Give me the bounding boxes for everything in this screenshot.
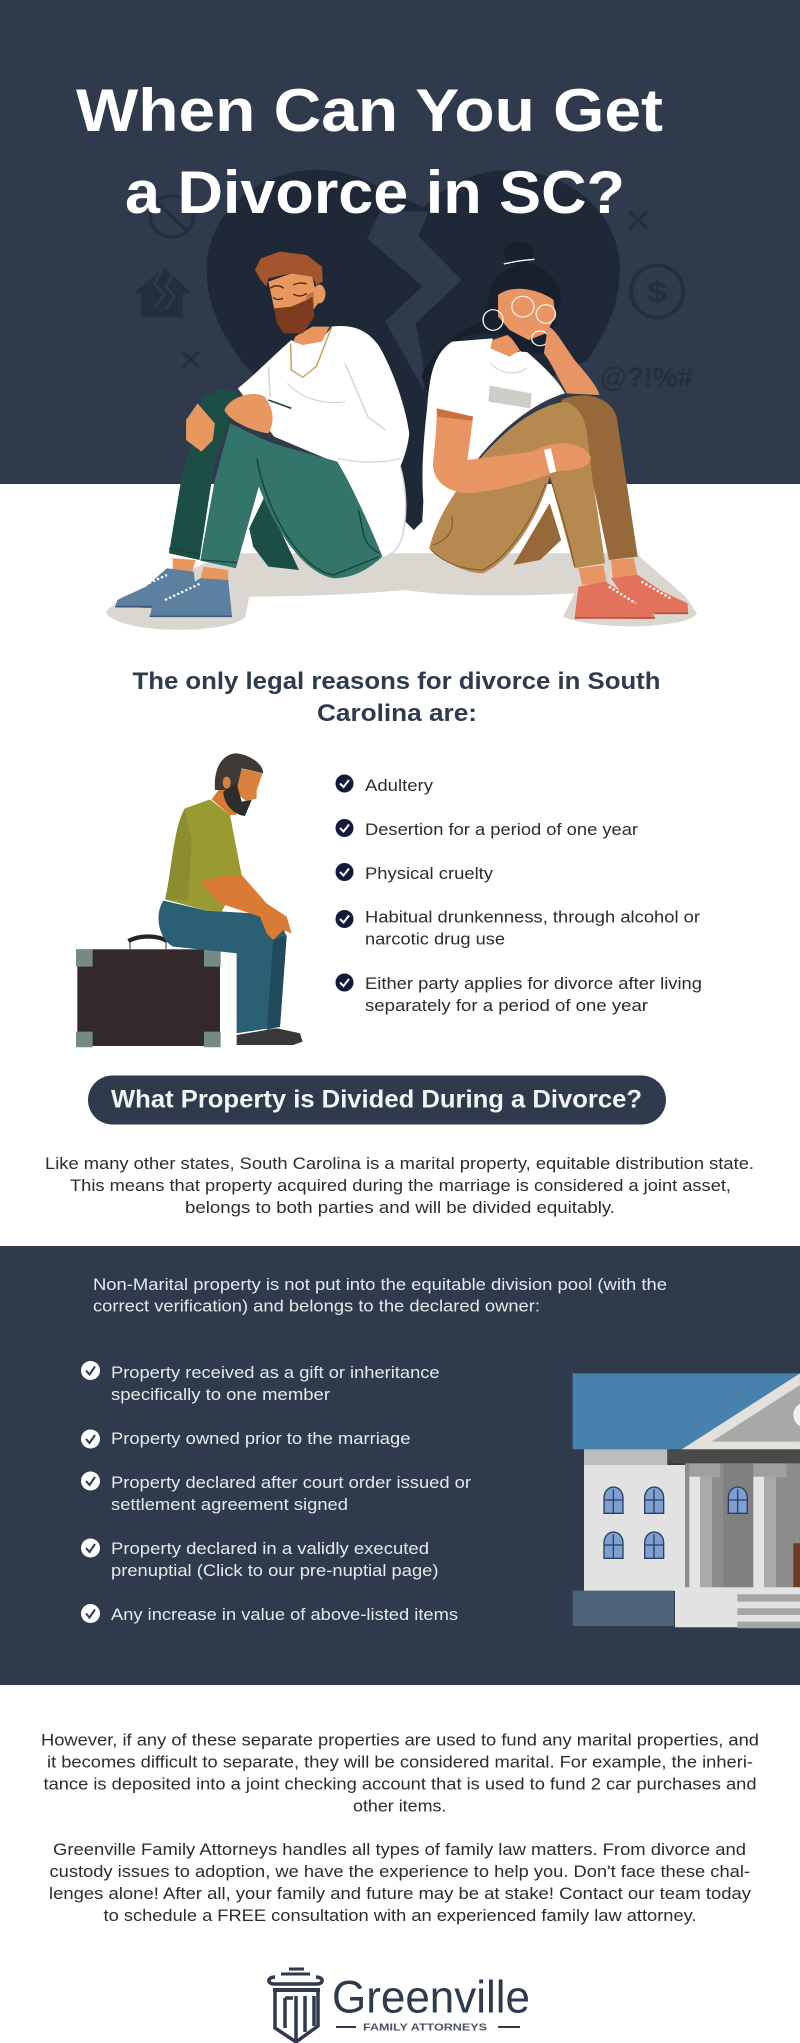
text block: equitable distribution	[45, 1155, 754, 1217]
background icons	[134, 170, 693, 530]
title: a Divorce in SC?	[125, 159, 625, 226]
man's pants	[159, 901, 287, 1033]
item: physical cruelty: Physical cruelty	[365, 865, 494, 883]
item: separation: separately for a period of one year	[365, 997, 649, 1015]
crack strip	[405, 427, 428, 530]
icon: no sign	[151, 196, 193, 237]
text block: firm description: to schedule a FREE consultation with an experienced family law attorney.	[104, 1907, 696, 1925]
text block: separate properties: However, if any of these separate properties are used to fund any marital properties, and	[41, 1732, 759, 1750]
text block: firm description: Greenville Family Attorneys handles all types of family law matters. From divorce and	[53, 1841, 746, 1859]
intro text: Non-Marital property is not put into the equitable division pool (with the	[93, 1276, 667, 1294]
broken heart	[207, 170, 620, 530]
heading: legal reasons: The only legal reasons for divorce in South	[132, 668, 660, 695]
item: desertion: Desertion for a period of one year	[365, 821, 639, 839]
logo: Greenville Family Attorneys: Greenville	[332, 1972, 530, 2022]
text block: firm description: custody issues to adoption, we have the experience to help you. Don't face these chal-	[50, 1863, 750, 1881]
man's head	[255, 252, 325, 333]
woman's shirt	[422, 338, 565, 540]
man's arm	[200, 875, 292, 940]
man's hands	[224, 394, 273, 433]
text block: firm description: lenges alone! After all, your family and future may be at stake! Contact our team today	[49, 1885, 752, 1903]
item: after court order	[81, 1472, 472, 1514]
suitcase	[76, 936, 221, 1047]
woman's pants thigh	[429, 402, 605, 573]
woman's raised arm	[544, 327, 599, 395]
intro text	[93, 1276, 667, 1316]
woman's ankles	[578, 558, 638, 585]
text block: separate properties: other items.	[353, 1797, 446, 1815]
man's shoes	[115, 568, 232, 617]
logo: Greenville Family Attorneys	[269, 1969, 530, 2042]
woman's arm	[433, 408, 591, 493]
man's back leg	[169, 390, 238, 560]
item: drunkenness: Habitual drunkenness, through alcohol or	[365, 908, 701, 926]
item: gift or inheritance: specifically to one member	[111, 1386, 331, 1404]
man's head	[215, 753, 263, 816]
icon: swearing symbols: @?!%#	[600, 361, 693, 393]
item: separation: Either party applies for divorce after living	[365, 975, 702, 993]
item: gift or inheritance: Property received as a gift or inheritance	[111, 1364, 440, 1382]
illustration: separated couple	[106, 242, 697, 630]
floor shadow	[106, 553, 697, 630]
title: When Can You Get	[76, 77, 663, 144]
woman's shoes	[575, 575, 688, 619]
text block: separate properties	[41, 1732, 759, 1815]
item: drunkenness: narcotic drug use	[365, 930, 505, 948]
illustration: man on suitcase	[76, 753, 303, 1047]
item: adultery	[336, 774, 434, 795]
heading: legal reasons	[132, 668, 660, 727]
man's shoe	[237, 1028, 303, 1045]
bracelet	[544, 448, 556, 473]
icon: broken house	[134, 267, 192, 317]
item: physical cruelty	[336, 863, 494, 883]
list: non-marital items	[81, 1361, 472, 1624]
text block: separate properties: it becomes difficult to separate, they will be considered marital. For example, the inheri-	[47, 1754, 753, 1772]
text block: equitable distribution: Like many other states, South Carolina is a marital property, equitable distribution state.	[45, 1155, 754, 1173]
item: separation	[336, 974, 702, 1015]
name patch	[488, 386, 532, 408]
icon: dollar	[631, 265, 683, 318]
man's ankles	[173, 558, 228, 582]
title	[76, 77, 663, 226]
heading pill: property division	[88, 1076, 666, 1124]
man's shirt	[165, 799, 242, 912]
icon: dollar: $	[647, 277, 668, 310]
illustration: courthouse	[573, 1373, 800, 1628]
windows	[604, 1487, 747, 1558]
item: prenuptial: prenuptial (Click to our pre-nuptial page)	[111, 1562, 438, 1580]
text block: equitable distribution: belongs to both parties and will be divided equitably.	[185, 1199, 615, 1217]
logo: Greenville Family Attorneys: FAMILY ATTORNEYS	[363, 2022, 487, 2034]
man's inner thigh	[249, 497, 299, 570]
woman's inner thigh	[513, 503, 561, 565]
panel: header background	[0, 0, 800, 530]
man's shirt	[238, 326, 409, 558]
item: after court order: Property declared after court order issued or	[111, 1474, 472, 1492]
item: drunkenness	[336, 908, 701, 948]
woman's glasses	[512, 296, 555, 323]
item: prior ownership: Property owned prior to the marriage	[111, 1430, 410, 1448]
intro text: correct verification) and belongs to the declared owner:	[93, 1298, 540, 1316]
woman's neck	[490, 335, 523, 357]
man's front leg	[200, 423, 382, 578]
item: prenuptial	[81, 1538, 438, 1580]
heading: legal reasons: Carolina are:	[317, 700, 477, 727]
logo pillar icon	[269, 1969, 322, 2042]
icon: cross left	[183, 352, 199, 367]
item: after court order: settlement agreement signed	[111, 1496, 348, 1514]
item: prenuptial: Property declared in a validly executed	[111, 1540, 429, 1558]
item: adultery: Adultery	[365, 777, 434, 795]
heading pill: property division: What Property is Divided During a Divorce?	[111, 1086, 642, 1114]
woman's hair	[421, 242, 561, 393]
woman's pants shin	[561, 395, 638, 560]
panel: non-marital property	[0, 1246, 800, 1685]
text block: separate properties: tance is deposited into a joint checking account that is used to fund 2 car purchases and	[44, 1776, 756, 1794]
woman's face	[498, 289, 555, 340]
item: gift or inheritance	[81, 1361, 440, 1404]
woman's earrings	[483, 310, 549, 346]
necklace	[291, 327, 332, 377]
text block: equitable distribution: This means that property acquired during the marriage is considered a joint asset,	[70, 1177, 731, 1195]
man	[115, 252, 409, 617]
man's neck	[293, 327, 330, 345]
item: increase in value: Any increase in value of above-listed items	[111, 1606, 458, 1624]
man's neck	[212, 783, 237, 815]
woman	[421, 242, 688, 619]
text block: firm description	[49, 1841, 752, 1925]
icon: cross right	[630, 211, 647, 229]
list: legal reasons	[336, 774, 702, 1015]
